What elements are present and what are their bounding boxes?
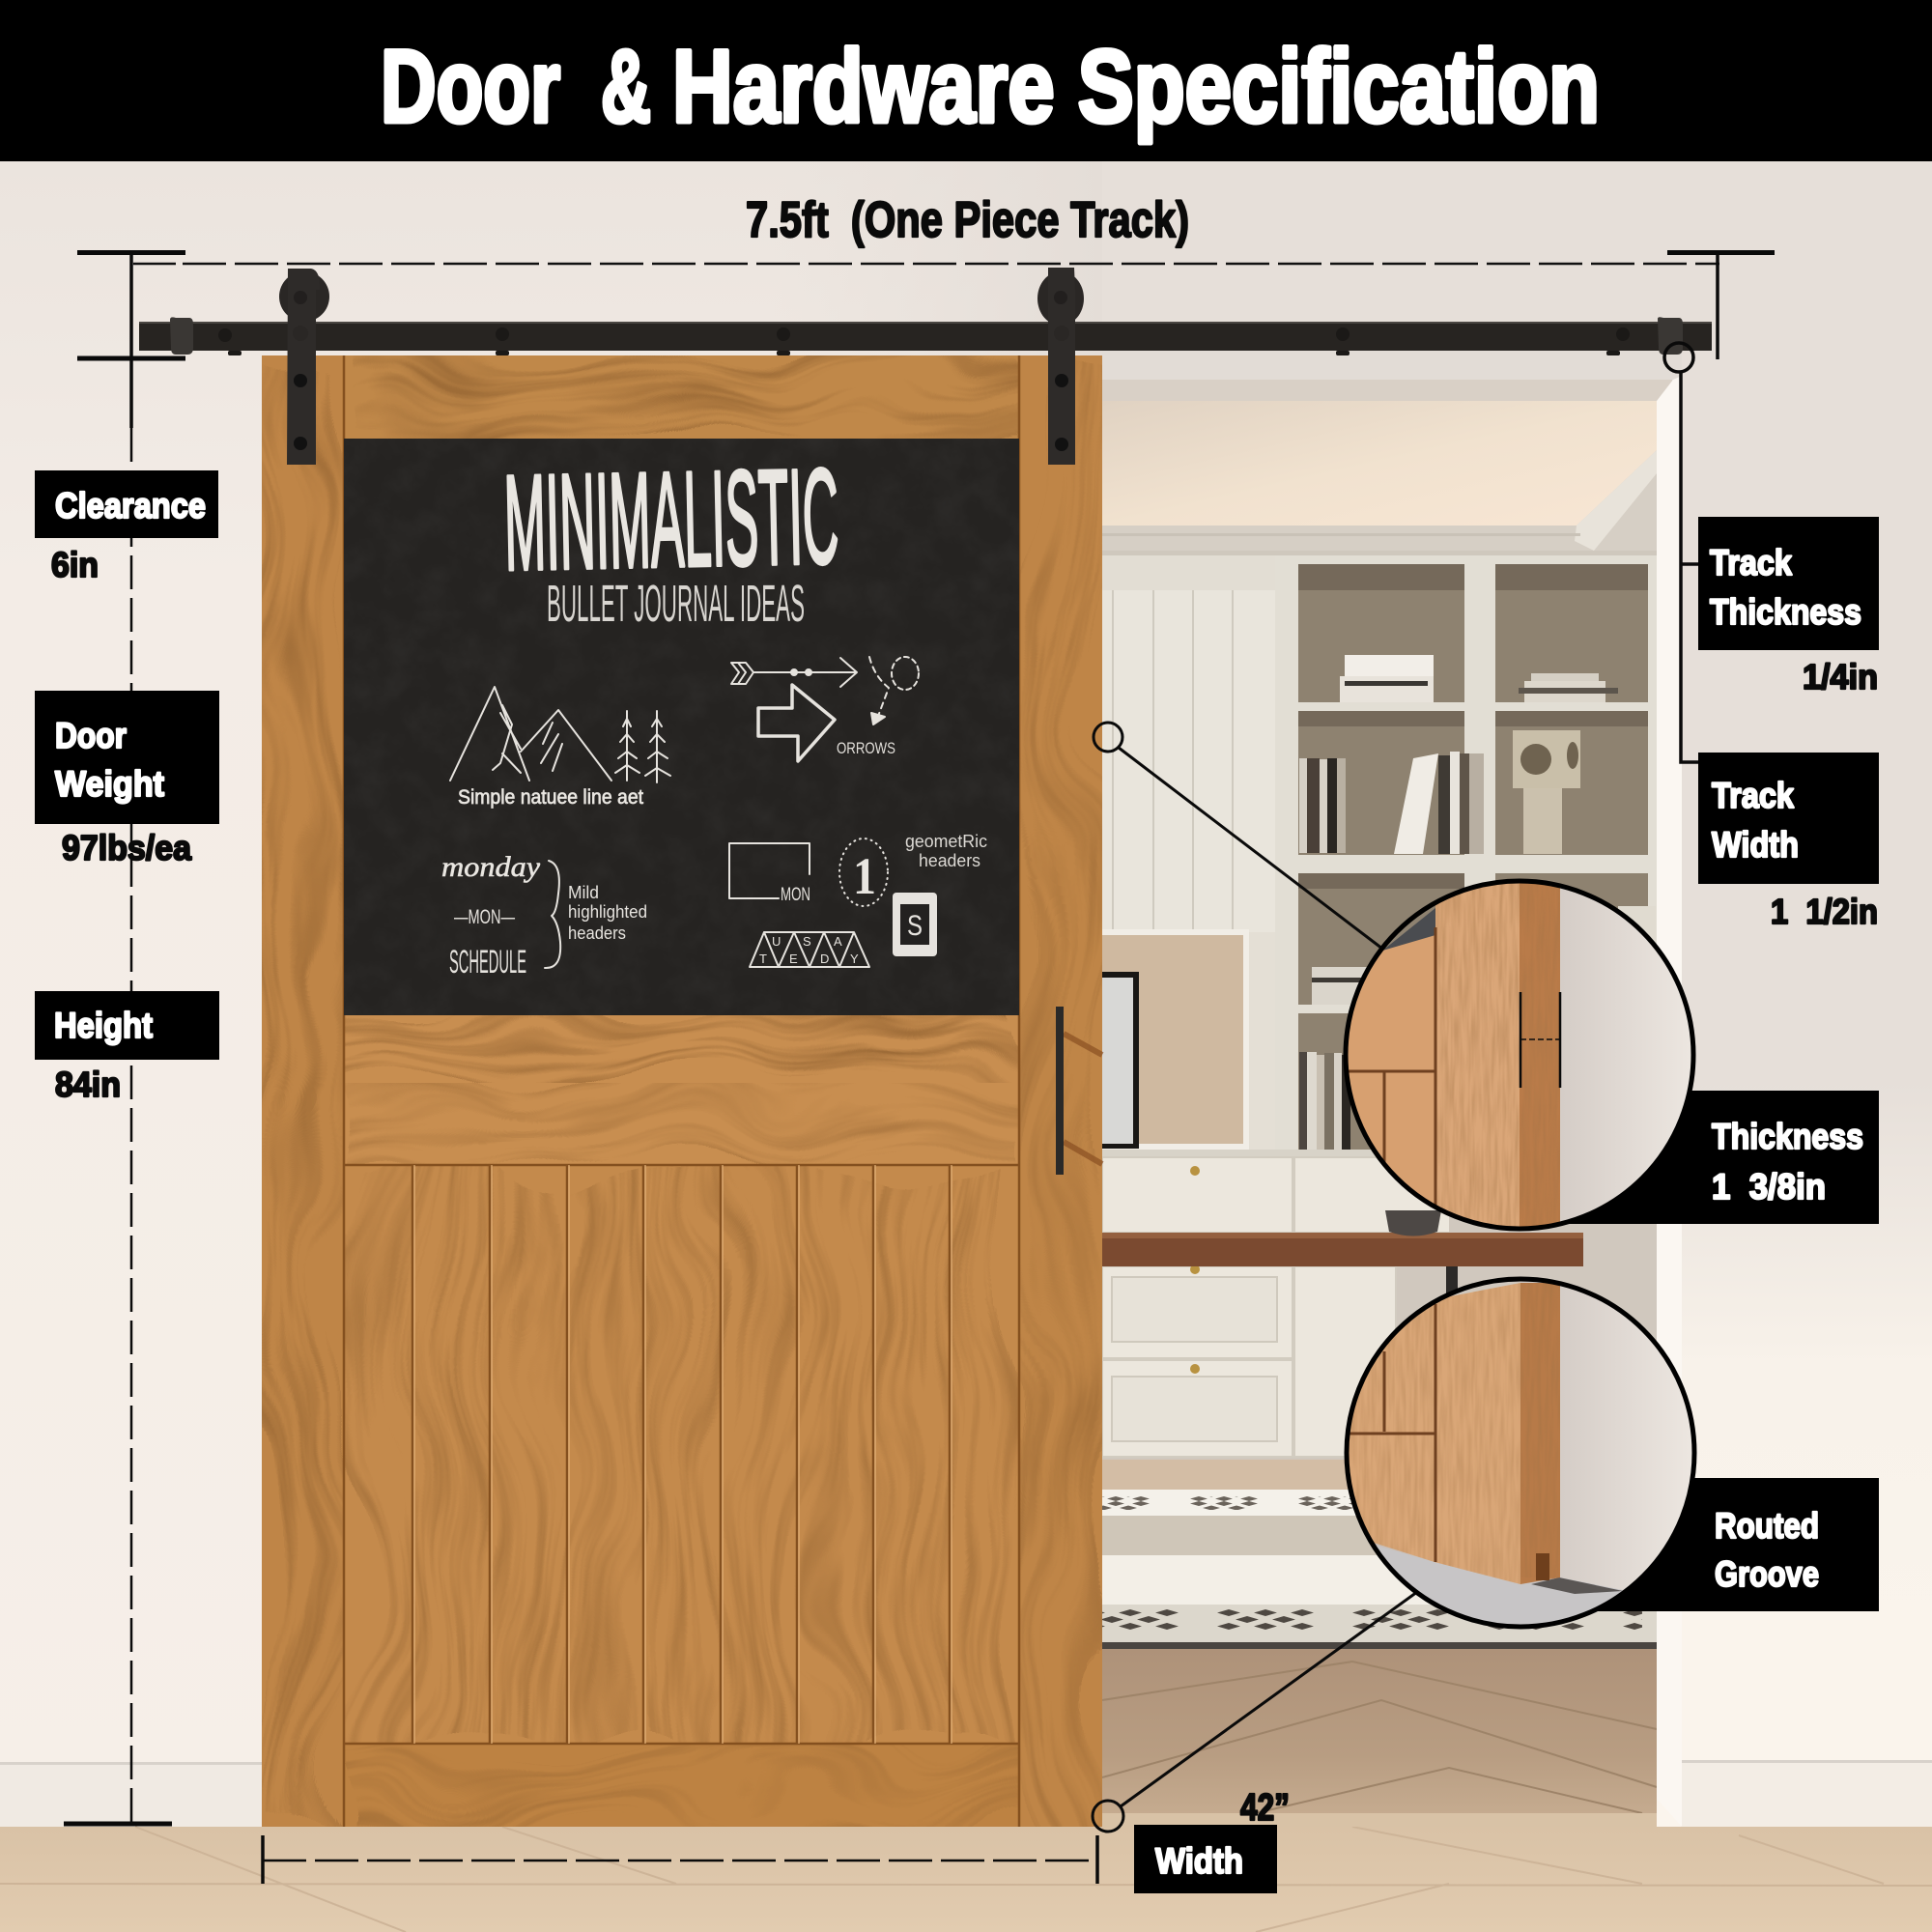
title: & <box>601 28 651 144</box>
chalk caption: geometric headers: geometRic <box>905 832 987 851</box>
label: clearance <box>35 470 218 584</box>
label: door weight: Door <box>55 716 127 755</box>
chalk numbered circle: 1 <box>853 847 876 905</box>
books and ornaments <box>1299 655 1656 1151</box>
paneled wall <box>1102 555 1276 932</box>
chalkboard <box>344 439 1019 1015</box>
door pull handle <box>1056 1007 1102 1175</box>
chalk pennants TUESDAY: D <box>820 952 829 966</box>
chalk bracket box with MON: MON <box>781 885 810 905</box>
barn door <box>262 355 1102 1827</box>
label: thickness: 1 3/8in <box>1712 1167 1826 1207</box>
label: track width <box>1698 753 1879 931</box>
crown moulding <box>1102 450 1657 555</box>
label: height: 84in <box>55 1065 121 1104</box>
vertical grain <box>262 355 344 1827</box>
track bolts <box>218 327 1630 355</box>
bottom rail <box>344 1744 1019 1827</box>
chalk caption: highlighted headers <box>568 883 647 943</box>
label: thickness <box>1546 1091 1879 1224</box>
floor band and rug <box>1102 1460 1657 1490</box>
label: track width: Width <box>1712 825 1799 865</box>
chalk pennants TUESDAY: Y <box>850 952 859 966</box>
label: track width: 1 1/2in <box>1771 892 1878 931</box>
chalk bracket box with MON <box>729 843 810 905</box>
callout pointer: thickness <box>1094 723 1382 949</box>
label: door weight <box>35 691 219 867</box>
label: track thickness: Track <box>1710 543 1792 582</box>
sliding track and hangers <box>139 268 1712 465</box>
lower rail <box>344 1015 1019 1165</box>
right hanger <box>1037 268 1084 465</box>
label: routed groove: Groove <box>1715 1554 1819 1594</box>
title bar <box>0 0 1932 161</box>
cabinets <box>1102 1150 1489 1157</box>
top rail <box>344 355 1019 439</box>
label: track thickness <box>1698 517 1879 696</box>
label: track thickness: 1/4in <box>1803 657 1878 696</box>
horizontal grain <box>344 355 1019 439</box>
label: width: Width <box>1155 1841 1243 1881</box>
callout pointer: routed groove <box>1093 1592 1417 1832</box>
plank panel <box>344 1165 1019 1744</box>
chalk arrows <box>731 657 919 761</box>
label: clearance: Clearance <box>55 486 206 526</box>
chalk pennants TUESDAY <box>750 932 869 967</box>
label: height: Height <box>54 1006 153 1045</box>
label: routed groove <box>1594 1478 1879 1611</box>
track length label: 7.5ft (One Piece Track) <box>746 192 1189 248</box>
chalk pennants TUESDAY: U <box>772 934 781 949</box>
floor <box>0 1827 1932 1932</box>
desk top <box>1102 1233 1583 1266</box>
magnifier: door thickness detail <box>1343 879 1700 1232</box>
chalk caption: geometric headers <box>905 832 987 870</box>
chalk caption: highlighted headers: headers <box>568 923 626 943</box>
room interior seen through the opening <box>1082 351 1682 1827</box>
title: Door <box>381 28 560 144</box>
label: door weight: Weight <box>55 764 164 804</box>
soffit above the opening <box>1102 351 1682 380</box>
leader from track end to track labels <box>1664 343 1698 762</box>
label: clearance: 6in <box>51 545 99 584</box>
framed art <box>1102 929 1249 1150</box>
title: Hardware Specification <box>672 28 1600 144</box>
end stops <box>170 317 193 355</box>
label: height <box>35 991 219 1104</box>
room floor <box>1102 1649 1657 1827</box>
panel joints <box>344 355 1019 1827</box>
chalk pennants TUESDAY: S <box>803 934 811 949</box>
left hanger <box>279 269 329 465</box>
ceiling with warm glow <box>1102 401 1657 526</box>
track bar <box>139 322 1712 351</box>
label: door weight: 97lbs/ea <box>62 828 192 867</box>
label: routed groove: Routed <box>1715 1506 1819 1546</box>
bowl on desk <box>1385 1210 1441 1236</box>
title <box>381 28 1600 144</box>
label: width: 42” <box>1240 1787 1290 1829</box>
chalk caption: highlighted headers: highlighted <box>568 902 647 922</box>
chalkboard: BULLET JOURNAL IDEAS <box>547 575 805 633</box>
chalk pennants TUESDAY: E <box>789 952 798 966</box>
door width dimension <box>263 1835 1097 1884</box>
magnifier: routed groove detail <box>1343 1275 1700 1633</box>
chalk caption: arrows: ORROWS <box>837 739 895 757</box>
label: track width: Track <box>1712 776 1794 815</box>
chalk mountains and trees <box>450 687 670 782</box>
chalk caption: highlighted headers: Mild <box>568 883 599 902</box>
label: track thickness: Thickness <box>1710 592 1861 632</box>
chalk pennants TUESDAY: T <box>759 952 767 966</box>
chalk brace <box>545 861 560 968</box>
chalk pennants TUESDAY: A <box>834 934 842 949</box>
chalkboard: MINIMALISTIC <box>502 440 840 599</box>
chalk headers list: monday <box>441 851 541 883</box>
chalk caption: nature: Simple natuee line aet <box>458 786 643 809</box>
chalk caption: geometric headers: headers <box>919 851 980 870</box>
chalk S tag: S <box>907 910 923 942</box>
door trim <box>1657 376 1682 1827</box>
chalkboard: —MON— <box>454 906 515 928</box>
bookcase compartments <box>1298 564 1464 702</box>
bookcase frame <box>1275 555 1657 1154</box>
chalk S tag <box>893 893 937 956</box>
label: thickness: Thickness <box>1712 1117 1863 1156</box>
chalk numbered circle <box>839 838 888 906</box>
label: width <box>1134 1787 1290 1893</box>
thickness marks <box>1520 992 1560 1088</box>
chalkboard: SCHEDULE <box>449 944 526 980</box>
door height and clearance dimension <box>64 252 185 1824</box>
